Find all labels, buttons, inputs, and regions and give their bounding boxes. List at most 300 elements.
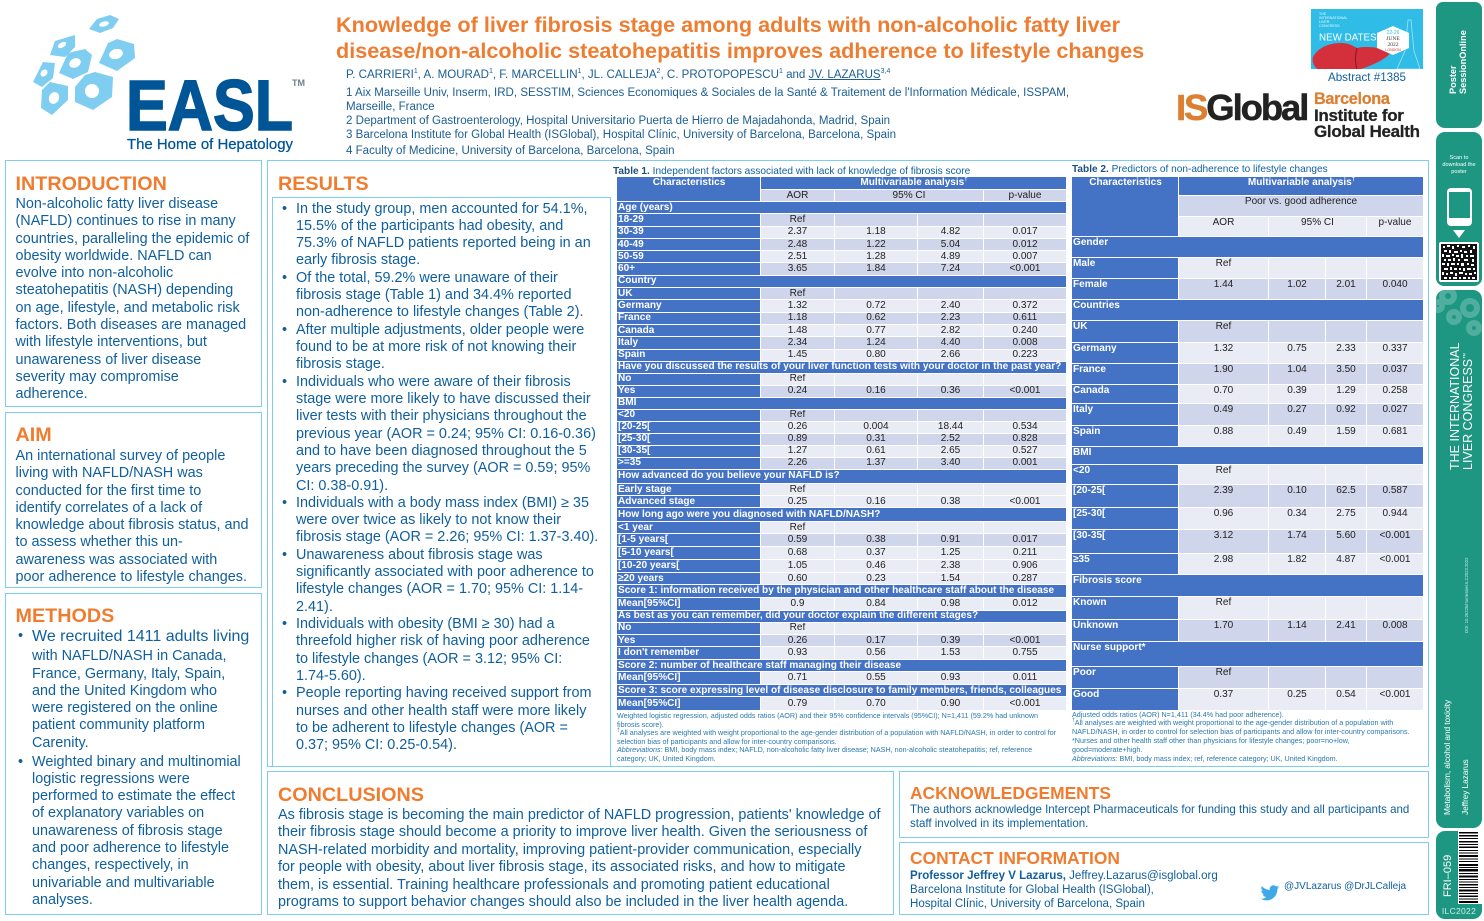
affiliations: 4 Faculty of Medicine, University of Barcelona, Barcelona, Spain (346, 145, 675, 157)
brand text: Poster (1448, 65, 1458, 94)
presenter: Jeffrey Lazarus (1460, 759, 1470, 815)
panel: introduction (5, 160, 262, 407)
table 1: 50-59 (618, 251, 644, 262)
bullet list: Individuals with obesity (BMI ≥ 30) had a (296, 616, 555, 632)
bullet list: Individuals with a body mass index (BMI) ≥ 35 (296, 495, 589, 511)
table 1: <0.001 (1010, 263, 1041, 274)
table 1: 0.46 (866, 560, 886, 571)
twitter handles: @JVLazarus @DrJLCalleja (1284, 881, 1406, 892)
table 1: 0.611 (1013, 312, 1037, 323)
table 1: 0.61 (866, 445, 886, 456)
table 1: 2.51 (788, 251, 807, 262)
table 2: 1.74 (1287, 530, 1307, 541)
congress banner: 22-26 (1387, 30, 1400, 36)
panel: methods (5, 593, 262, 915)
table 2: [25-30[ (1073, 508, 1105, 519)
table 1: 0.17 (866, 635, 886, 646)
table 2: 2.33 (1336, 343, 1356, 354)
table 2: Male (1073, 258, 1095, 268)
results findings: • (282, 322, 287, 338)
title: disease/non-alcoholic steatohepatitis improves adherence to lifestyle changes (336, 38, 1144, 63)
congress banner: NEW DATES (1319, 32, 1377, 44)
table 1 footnotes: fibrosis score). (617, 720, 664, 729)
congress banner: 2022 (1388, 42, 1399, 48)
affiliations: 2 Department of Gastroenterology, Hospital Universitario Puerta de Hierro de Majadahonda, Madrid, Spain (346, 115, 890, 127)
table 1: AOR (787, 190, 808, 200)
text block: with lifestyle interventions, but (16, 334, 207, 350)
table 1: 1.54 (941, 573, 960, 584)
bullet list: 1.74-5.60). (296, 668, 366, 684)
table 1: 0.017 (1012, 226, 1038, 237)
bullet list: liver tests with their physicians throughout the (296, 408, 587, 424)
table 1: Early stage (618, 484, 672, 494)
sidebar: congress band (1436, 290, 1482, 828)
table 1: As best as you can remember, did your doctor explain the different stages? (618, 610, 978, 621)
table 1: 0.527 (1012, 445, 1038, 456)
table 2: Multivariable analysis† (1248, 177, 1355, 188)
table 1: <0.001 (1010, 698, 1041, 709)
table 1 title: Table 1. Independent factors associated with lack of knowledge of fibrosis score (613, 166, 970, 176)
wordmark: EASL: EASL (126, 67, 293, 146)
session: Metabolism, alcohol and toxicity (1442, 700, 1452, 815)
table 1: 0.77 (866, 325, 886, 336)
table 2: 0.037 (1382, 364, 1408, 375)
congress banner: THE (1319, 12, 1327, 16)
bullet list: lifestyle changes (AOR = 1.70; 95% CI: 1.14- (296, 581, 583, 597)
table 1: 4.82 (941, 226, 960, 237)
table 2: 0.681 (1382, 426, 1408, 436)
methods list: and poor adherence to lifestyle (32, 840, 229, 856)
table 1: 0.011 (1013, 672, 1037, 683)
trademark: TM (292, 78, 305, 88)
table 1: 1.32 (788, 300, 807, 311)
affiliations: Marseille, France (346, 101, 435, 113)
table 2: 3.12 (1214, 530, 1233, 541)
bullet list: Individuals who were aware of their fibrosis (296, 374, 571, 390)
text block (16, 196, 250, 402)
logo: ISGlobal: Global Health (1314, 122, 1420, 141)
table 1: 0.26 (788, 421, 807, 432)
table 1: 0.60 (788, 573, 807, 584)
table 1: [5-10 years[ (618, 547, 674, 558)
table 1: 0.93 (788, 647, 807, 658)
results findings: • (282, 495, 287, 511)
table 1: Canada (618, 325, 654, 336)
table 2: 1.02 (1287, 279, 1307, 290)
text block: evolve into non-alcoholic (16, 265, 173, 281)
date hexagon (1377, 26, 1409, 55)
text block: conducted for the first time to (16, 483, 201, 499)
table 2: BMI (1073, 446, 1091, 458)
text block (910, 804, 1409, 830)
caption (1442, 155, 1476, 175)
table 1: 0.59 (788, 534, 807, 545)
table 2: 0.040 (1382, 279, 1408, 290)
table 1 (617, 177, 1066, 710)
contact text: Professor Jeffrey V Lazarus, Jeffrey.Lazarus@isglobal.org (910, 870, 1218, 882)
table 1 footnotes: category; UK, United Kingdom. (617, 754, 716, 763)
table 2: 1.82 (1287, 554, 1307, 565)
table 1: 2.37 (788, 226, 807, 237)
table 1: 2.66 (941, 349, 960, 360)
table 1: 0.38 (866, 534, 886, 545)
table 1: 2.34 (788, 337, 807, 348)
methods list: were registered on the online (32, 700, 218, 716)
table 1: 0.56 (866, 647, 886, 658)
table 2: 5.60 (1336, 530, 1356, 541)
results findings: • (282, 270, 287, 286)
table 2 footnotes: *Nurses and other health staff other than physicians for lifestyle changes; poor=no+low, (1072, 736, 1350, 745)
table 1: Italy (618, 337, 638, 348)
table 2: 2.01 (1336, 279, 1356, 290)
bullet list: and to have been diagnosed throughout the 5 (296, 443, 587, 459)
panel: aim (5, 412, 262, 588)
heading: ACKNOWLEDGEMENTS (910, 783, 1111, 803)
table 1: 7.24 (941, 263, 960, 274)
table 2: 95% CI (1301, 217, 1334, 228)
bullet list: CI: 0.38-0.91). (296, 478, 388, 494)
table 1: 2.38 (941, 560, 960, 571)
table 1: Ref (790, 288, 805, 299)
text block (278, 807, 881, 910)
contact text (910, 870, 1218, 910)
logo: ISGlobal: Institute for (1314, 106, 1404, 124)
abstract number: Abstract #1385 (1328, 71, 1406, 84)
text block: programs to support behavior changes should also be included in the liver health agenda. (278, 894, 848, 910)
table 1: 40-49 (618, 239, 644, 250)
methods list (18, 628, 249, 751)
congress banner: CONGRESS (1319, 24, 1340, 28)
text block: awareness was associated with (16, 552, 217, 568)
table 2: <0.001 (1380, 554, 1411, 565)
table 1: 0.001 (1012, 457, 1038, 468)
table 1: 0.017 (1012, 534, 1038, 545)
table 1: 0.008 (1012, 337, 1038, 348)
methods list: of explanatory variables on (32, 805, 204, 821)
table 2: [30-35[ (1073, 530, 1105, 541)
table 1 footnotes: Weighted logistic regression, adjusted odds ratios (AOR) and their 95% confidence intervals (95%CI); N=1,411 (59.2% had unknown (617, 711, 1038, 720)
table 1: How advanced do you believe your NAFLD is? (618, 470, 840, 481)
congress banner: LONDON (1385, 48, 1401, 52)
bullet list: In the study group, men accounted for 54.1%, (296, 200, 588, 216)
table 1: 0.98 (941, 598, 960, 609)
table 2: 0.027 (1382, 404, 1408, 415)
bullet list: non-adherence to lifestyle changes (Table 2). (296, 304, 584, 320)
table 1: 0.24 (788, 385, 807, 396)
bullet list (282, 200, 598, 753)
bullet list: to lifestyle changes (AOR = 3.12; 95% CI: (296, 651, 562, 667)
icon: down arrow (1453, 230, 1465, 238)
bullet list: 0.37; 95% CI: 0.25-0.54). (296, 737, 457, 753)
title: Knowledge of liver fibrosis stage among adults with non-alcoholic fatty liver (336, 12, 1120, 37)
methods list: Carenity. (32, 735, 89, 751)
methods list: France, Germany, Italy, Spain, (32, 666, 225, 682)
table 2: 1.29 (1336, 385, 1356, 396)
bullet list: were over twice as likely to not know their (296, 512, 561, 528)
table 1: Have you discussed the results of your liver function tests with your doctor in the past year? (618, 361, 1061, 372)
table 2: France (1073, 364, 1106, 375)
text block: severity may compromise (16, 369, 179, 385)
table 1: Multivariable analysis† (860, 177, 968, 188)
text block: The authors acknowledge Intercept Pharmaceuticals for funding this study and all participants and (910, 804, 1409, 816)
table 2: Countries (1073, 300, 1120, 311)
table 2: 4.87 (1336, 554, 1356, 565)
congress tag: ILC2022 (1442, 906, 1476, 916)
table 1: 0.007 (1012, 251, 1038, 262)
table 1: 0.37 (866, 547, 886, 558)
table 1: 0.004 (863, 421, 889, 432)
qr code (1439, 242, 1479, 282)
table 1: Mean[95%CI] (618, 598, 681, 609)
heading: RESULTS (278, 173, 369, 195)
results findings: • (282, 547, 287, 563)
contact text: Hospital Clínic, University of Barcelona, Spain (910, 898, 1145, 910)
bullet list: 2.41). (296, 599, 333, 615)
table 2: 1.14 (1287, 620, 1307, 631)
bullet list: fibrosis stage (AOR = 2.26; 95% CI: 1.37-3.40). (296, 529, 598, 545)
logo: ISGlobal: Barcelona (1314, 90, 1390, 108)
table 1: <0.001 (1010, 385, 1041, 396)
text block: them, is essential. Training healthcare professionals and promoting patient educational (278, 877, 830, 893)
logo: ISGlobal (1176, 87, 1420, 141)
table 2: Known (1073, 597, 1106, 608)
table 1: 0.55 (866, 672, 886, 683)
sidebar: poster session online (1436, 2, 1482, 128)
table 1: 2.48 (788, 239, 807, 250)
methods list: univariable and multivariable (32, 875, 215, 891)
results findings: • (282, 200, 287, 216)
table 1: 0.534 (1012, 421, 1038, 432)
table 2: 0.258 (1382, 385, 1408, 396)
congress banner (1311, 9, 1423, 69)
title (336, 12, 1144, 63)
table 1: 1.84 (866, 263, 886, 274)
congress name: LIVER CONGRESS™ (1460, 353, 1474, 470)
table 2: 0.27 (1287, 404, 1307, 415)
table 1: ≥20 years (618, 573, 664, 584)
table 1: 0.26 (788, 635, 807, 646)
table 1: Mean[95%CI] (618, 698, 681, 709)
table 2: ≥35 (1073, 554, 1090, 565)
methods list: and the United Kingdom who (32, 683, 217, 699)
table 2: Unknown (1073, 620, 1118, 631)
text block: NASH-related morbidity and mortality, improving patient-provider communication, especially (278, 842, 861, 858)
bullet list: threefold higher risk of having poor adherence (296, 633, 590, 649)
table 2: 0.70 (1214, 385, 1233, 396)
table 1: 95% CI (893, 190, 925, 200)
brand text (1448, 30, 1468, 94)
table 1: <1 year (618, 522, 653, 533)
icon: phone (1447, 188, 1472, 226)
text block: to assess whether this un- (16, 534, 183, 550)
bullet list: previous year (AOR = 0.24; 95% CI: 0.16-0.36) (296, 426, 596, 442)
table 1: 0.72 (866, 300, 886, 311)
bullet list: People reporting having received support from (296, 685, 592, 701)
table 1: UK (618, 288, 633, 299)
table 1: 0.223 (1012, 349, 1038, 360)
table 2: Ref (1216, 465, 1231, 476)
table 1: 4.40 (941, 337, 960, 348)
table 2: Ref (1216, 321, 1231, 332)
table 1: 1.48 (788, 325, 807, 336)
table 1: 0.012 (1012, 239, 1038, 250)
table 1: Germany (618, 300, 662, 311)
table 1 footnotes: Abbreviations: BMI, body mass index; NAFLD, non-alcoholic fatty liver disease; NASH, non-alcoholic steatohepatitis; ref, reference (617, 745, 1032, 754)
icon: liver cell hexagons (33, 15, 135, 115)
methods list: changes, respectively, in (32, 857, 189, 873)
table 1: 0.23 (866, 573, 886, 584)
text block: steatohepatitis (NASH) depending (16, 282, 233, 298)
text block: adherence. (16, 386, 88, 402)
table 1: 18-29 (618, 214, 644, 225)
panel: methods: • (18, 754, 23, 770)
table 1: 2.40 (941, 300, 960, 311)
table 1: Score 3: score expressing level of disease disclosure to family members, friends, colleagues (618, 685, 1061, 696)
text block: for people with obesity, about liver fibrosis stage, its associated risks, and how to mitigate (278, 859, 845, 875)
table 2: UK (1073, 321, 1088, 332)
table 1: Spain (618, 349, 645, 360)
congress name (1448, 342, 1474, 470)
table 1: [20-25[ (618, 421, 650, 432)
panel: acknowledgements (899, 771, 1429, 838)
table 2: 0.944 (1382, 508, 1408, 519)
table 1: BMI (618, 397, 636, 408)
table 1: 0.16 (866, 385, 886, 396)
table 2 footnotes: NAFLD/NASH, in order to control for selection bias of participants and allow for inter-country comparisons. (1072, 727, 1410, 736)
table 2: Italy (1073, 404, 1093, 415)
table 2: Spain (1073, 426, 1100, 436)
table 1: 1.28 (866, 251, 886, 262)
table 1: [25-30[ (618, 433, 650, 444)
table 2: 0.10 (1287, 485, 1307, 496)
table 1: <20 (618, 409, 635, 420)
table 1: 0.36 (941, 385, 960, 396)
table 1: 18.44 (938, 421, 963, 432)
affiliations: 3 Barcelona Institute for Global Health (ISGlobal), Hospital Clínic, University of Barcelona, Barcelona, Spain (346, 129, 896, 141)
text block: obesity worldwide. NAFLD can (16, 248, 212, 264)
table 2: 1.59 (1336, 426, 1356, 436)
results findings (272, 197, 611, 767)
table 2: 1.70 (1214, 620, 1233, 631)
results findings: • (282, 374, 287, 390)
table 2: [20-25[ (1073, 485, 1105, 496)
table 2: 0.75 (1287, 343, 1307, 354)
table 1: 1.05 (788, 560, 807, 571)
table 2: 0.008 (1382, 620, 1408, 631)
bullet list: found to be at more risk of not knowing their (296, 339, 576, 355)
methods list: performed to estimate the effect (32, 788, 235, 804)
table 2 footnotes: Abbreviations: BMI, body mass index; ref, reference category; UK, United Kingdom. (1072, 754, 1338, 763)
caption: Scan to (1450, 155, 1468, 161)
text block: on age, lifestyle, and metabolic risk (16, 300, 240, 316)
bullet list: 15.5% of the participants had obesity, and (296, 218, 563, 234)
bullet list: Unawareness about fibrosis stage was (296, 547, 543, 563)
table 1: <0.001 (1010, 635, 1041, 646)
congress name: THE INTERNATIONAL (1448, 342, 1462, 470)
table 2: 0.49 (1287, 426, 1307, 436)
contact text: Barcelona Institute for Global Health (ISGlobal), (910, 884, 1154, 896)
table 1: 0.372 (1012, 300, 1038, 311)
table 1: 0.828 (1012, 433, 1038, 444)
heading: INTRODUCTION (16, 173, 167, 195)
logo: EASL (33, 15, 305, 153)
table 2: 2.39 (1214, 485, 1233, 496)
results findings: • (282, 616, 287, 632)
text block: factors. Both diseases are managed (16, 317, 246, 333)
table 1: 0.755 (1012, 647, 1038, 658)
text block (16, 448, 249, 585)
bullet list: fibrosis stage. (296, 356, 385, 372)
table 2: Ref (1216, 258, 1231, 268)
table 2: 0.34 (1287, 508, 1307, 519)
table 1: No (618, 622, 631, 633)
table 2: Good (1073, 689, 1099, 700)
barcode (1458, 831, 1482, 904)
table 2: 2.75 (1336, 508, 1356, 519)
table 2: <0.001 (1380, 689, 1411, 700)
table 1: 1.25 (941, 547, 960, 558)
affiliations: 1 Aix Marseille Univ, Inserm, IRD, SESSTIM, Sciences Economiques & Sociales de la Santé & Traitement de l'Information Médicale, ISSPAM, (346, 86, 1069, 98)
congress banner: INTERNATIONAL (1319, 16, 1348, 20)
table 2: p-value (1379, 217, 1411, 228)
text block: As fibrosis stage is becoming the main predictor of NAFLD progression, patients' knowledge of (278, 807, 881, 823)
table 1: 0.79 (788, 698, 807, 709)
table 1: Age (years) (618, 202, 673, 213)
congress banner: LIVER (1319, 20, 1330, 24)
table 2: 0.88 (1214, 426, 1233, 436)
brand text: SessionOnline (1458, 30, 1468, 94)
table 2: Nurse support* (1073, 642, 1146, 653)
table 1: Yes (618, 385, 635, 396)
table 1: 0.31 (866, 433, 886, 444)
table 2: Poor vs. good adherence (1245, 196, 1357, 207)
table 2: <20 (1073, 465, 1090, 476)
table 1: 60+ (618, 263, 635, 274)
bullet list: stage were more likely to have discussed their (296, 391, 591, 407)
icon: twitter (1260, 885, 1280, 900)
table 1: 1.53 (941, 647, 960, 658)
bullet list: years preceding the survey (AOR = 0.59; 95% (296, 460, 590, 476)
table 1: 0.62 (866, 312, 886, 323)
table 1: 2.52 (941, 433, 960, 444)
table 1: 4.89 (941, 251, 960, 262)
table 2: 3.50 (1336, 364, 1356, 375)
table 2: 0.54 (1336, 689, 1356, 700)
text block: identify correlates of a lack of (16, 500, 202, 516)
table 2 footnotes: †All analyses are weighted with weight proportional to the age-gender distribution of a population with (1072, 718, 1393, 727)
table 1: 2.82 (941, 325, 960, 336)
table 1: 1.18 (788, 312, 807, 323)
table 2: 0.37 (1214, 689, 1233, 700)
caption: download the (1442, 162, 1476, 168)
table 1: Score 1: information received by the physician and other healthcare staff about the disease (618, 585, 1054, 596)
logo: ISGlobal: ISGlobal (1176, 87, 1307, 128)
table 1: No (618, 373, 631, 384)
table 2: Ref (1216, 597, 1231, 608)
table 2: 1.44 (1214, 279, 1233, 290)
methods list: analyses. (32, 892, 93, 908)
sidebar: poster id (1436, 831, 1482, 919)
table 1 footnotes: †All analyses are weighted with weight proportional to the age-gender distribution of a population with NAFLD/NASH, in order to control for (617, 728, 1056, 737)
heading: CONCLUSIONS (278, 784, 424, 806)
table 1: 1.22 (866, 239, 886, 250)
table 1: 0.91 (941, 534, 960, 545)
table 1: 0.89 (788, 433, 807, 444)
table 1: 2.23 (941, 312, 960, 323)
bullet list: early fibrosis stage. (296, 252, 420, 268)
table 1: [1-5 years[ (618, 534, 668, 545)
table 1: 0.39 (941, 635, 960, 646)
